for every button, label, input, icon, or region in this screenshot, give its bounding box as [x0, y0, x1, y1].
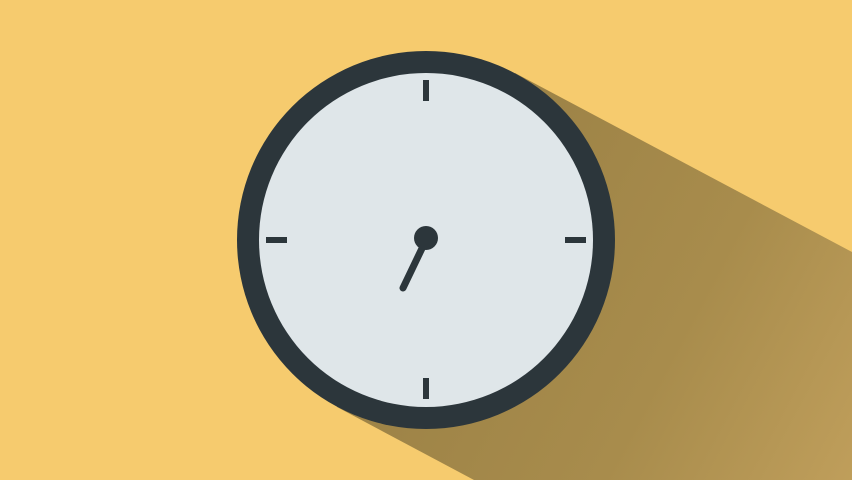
clock: [237, 51, 615, 429]
long shadow: [337, 73, 852, 480]
clock face: [259, 73, 593, 407]
hour ticks: [266, 80, 586, 399]
clock bezel: [237, 51, 615, 429]
clock hand: [403, 226, 438, 288]
